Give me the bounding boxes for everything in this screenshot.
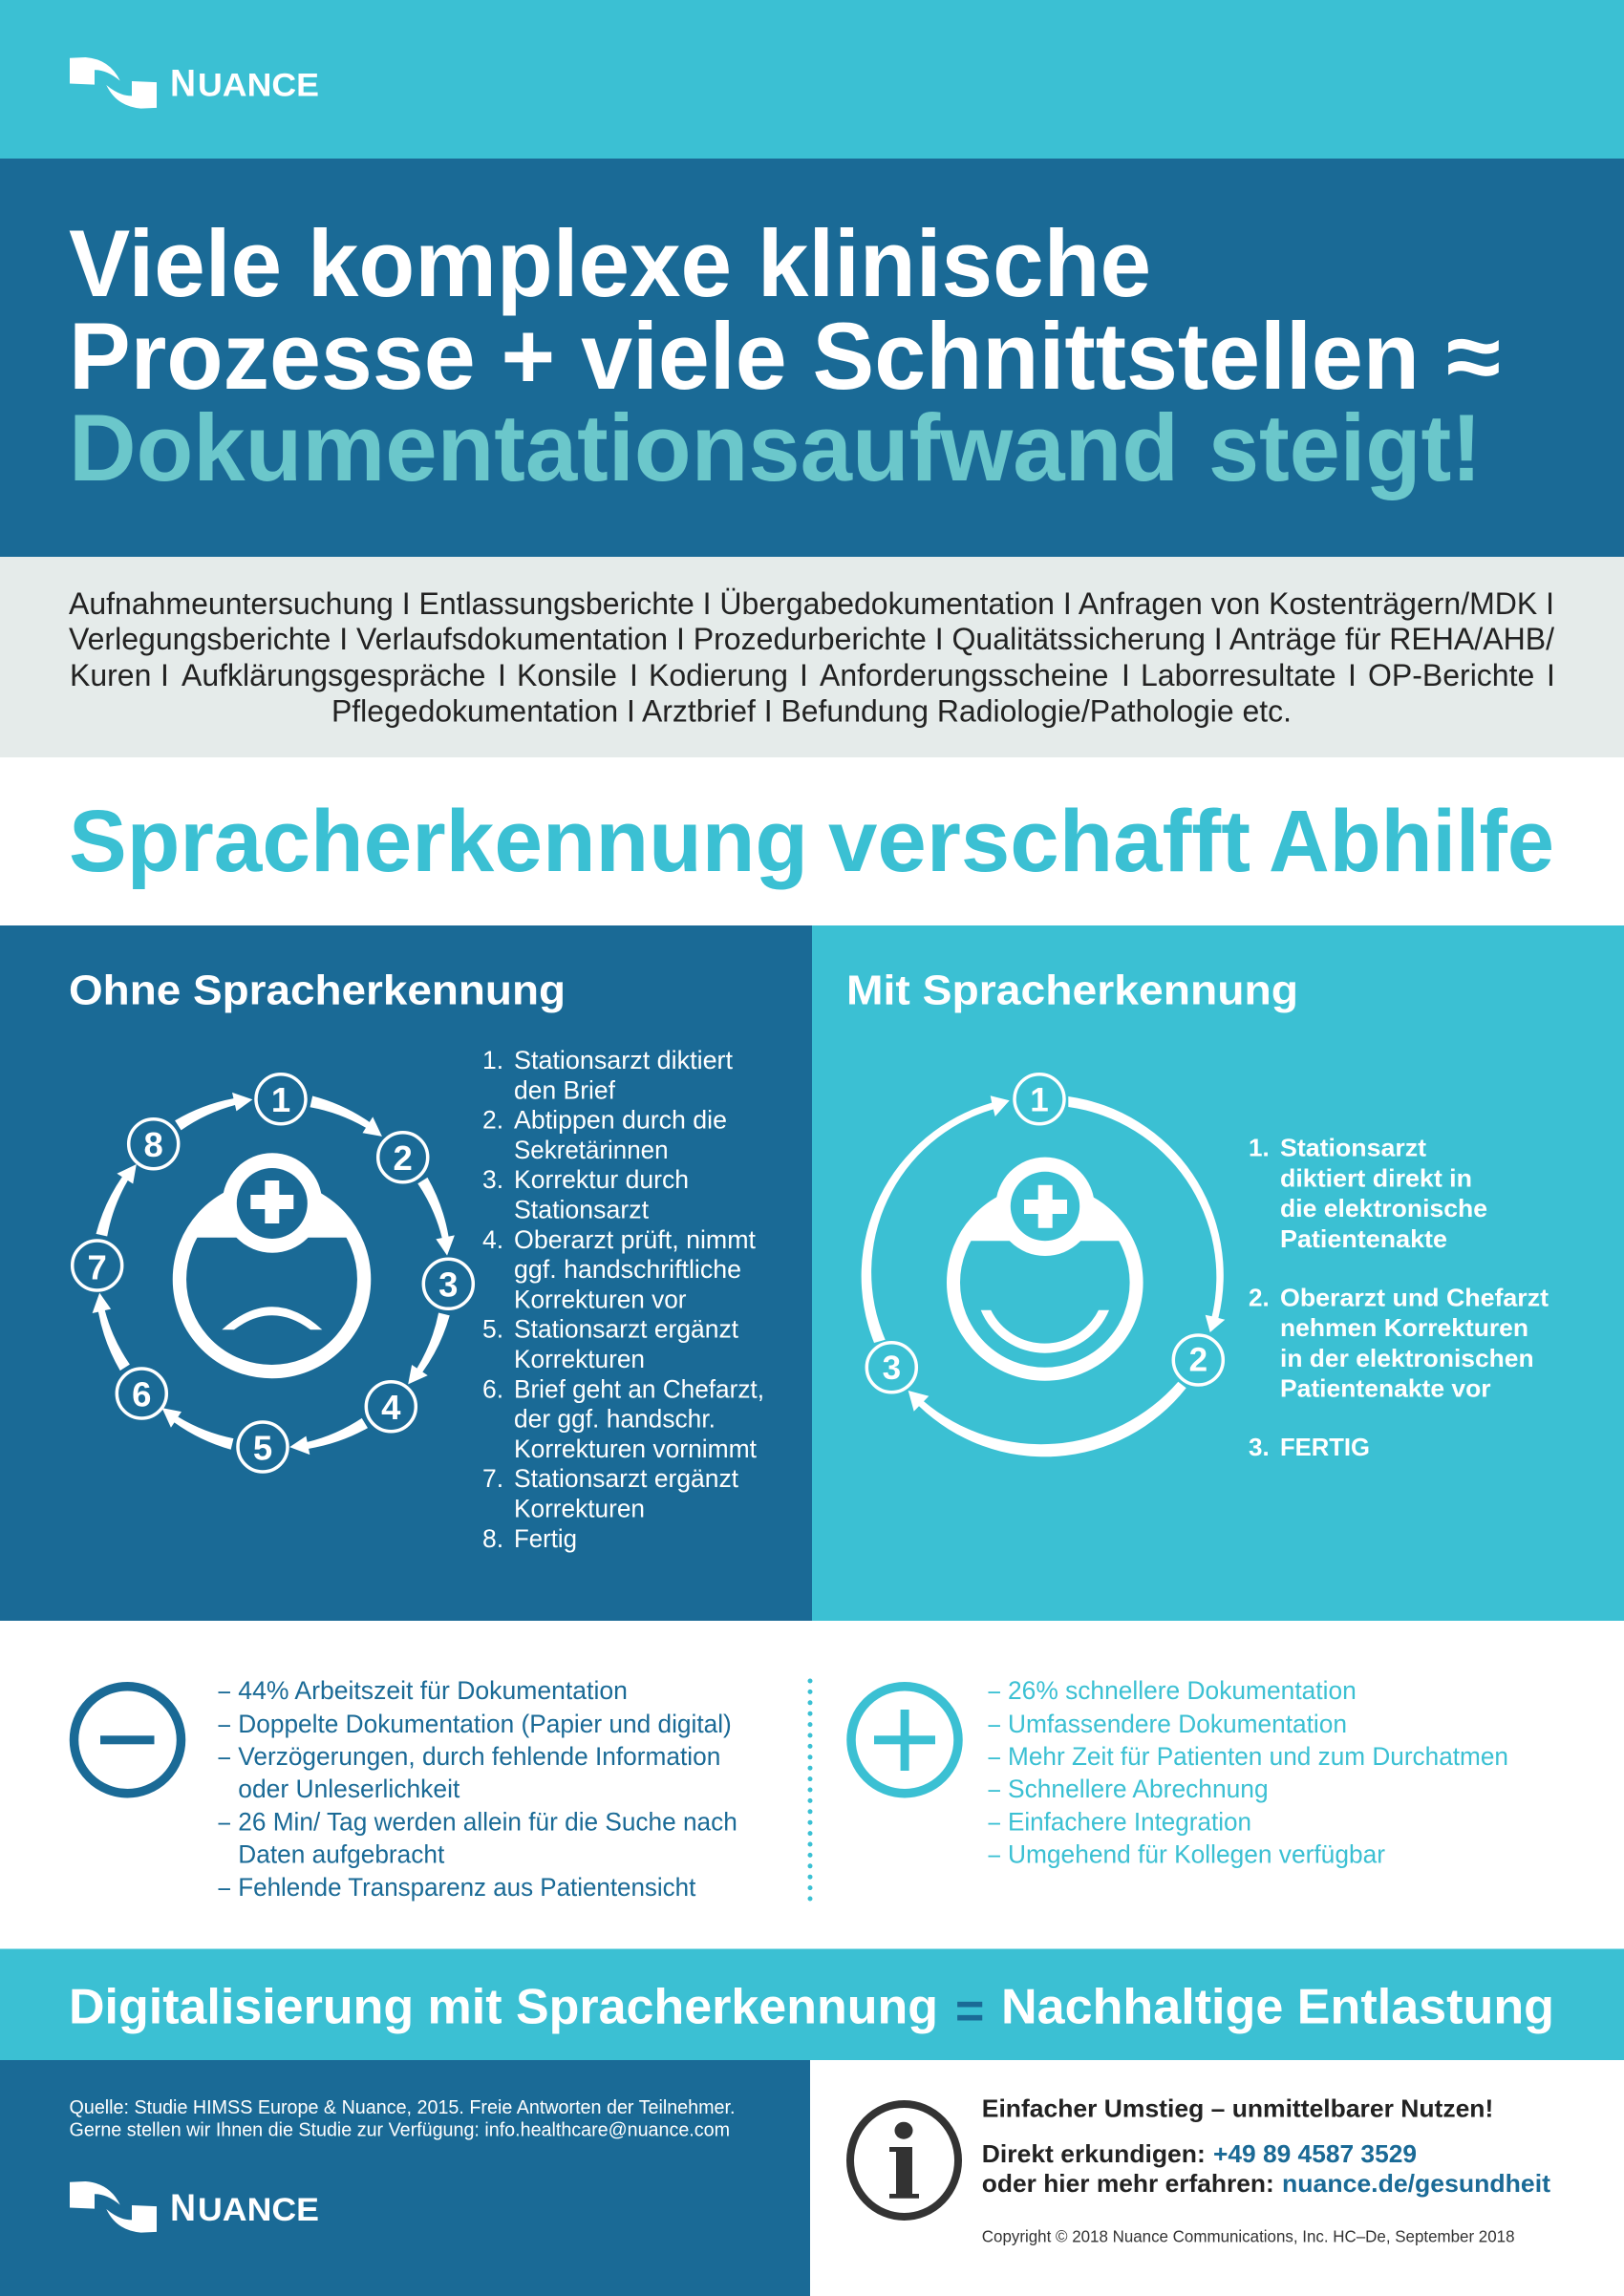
numbered list: steps without speech recognition: der ggf. handschr. [514,1405,716,1434]
contact text [982,2094,1550,2198]
panel heading: Ohne Spracherkennung [69,968,566,1014]
numbered list: steps with speech recognition: die elektronische [1280,1194,1487,1222]
text block: documentation list: OP-Berichte [1368,658,1543,692]
numbered list: steps without speech recognition: Stationsarzt ergänzt [514,1315,739,1344]
numbered list: steps without speech recognition: Stationsarzt ergänzt [514,1464,739,1493]
panel: Mit Spracherkennung [812,925,1624,1621]
text block: documentation list: I [498,658,515,692]
contact text: oder hier mehr erfahren: [982,2169,1274,2198]
numbered list: steps without speech recognition: 6. [482,1374,503,1403]
numbered list: steps without speech recognition: Korrekturen vornimmt [514,1435,758,1463]
numbered list: steps with speech recognition: nehmen Korrekturen [1280,1313,1528,1342]
list: advantages: Schnellere Abrechnung [1008,1775,1269,1803]
list: disadvantages: – [218,1808,230,1837]
list: advantages: Umfassendere Dokumentation [1008,1710,1347,1738]
title: Viele komplexe klinische [69,210,1151,316]
text block: documentation list: I [1348,658,1365,692]
step numbers 1 to 8: 8 [144,1125,163,1164]
numbered list: steps with speech recognition: 1. [1249,1134,1270,1162]
text block: documentation list: Anforderungsscheine [820,658,1117,692]
step circles 1 to 3 [866,1074,1223,1392]
numbered list: steps with speech recognition: Patientenakte vor [1280,1374,1491,1403]
numbered list: steps without speech recognition: ggf. handschriftliche [514,1255,741,1284]
cycle arrows: eight steps [72,1073,475,1476]
text block: documentation list: Kodierung [649,658,797,692]
numbered list: steps without speech recognition [482,1046,764,1553]
icon: information [850,2104,958,2217]
step numbers 1 to 8: 1 [271,1080,290,1119]
logo: Nuance footer: UANCE [198,2192,319,2228]
step numbers 1 to 8: 4 [381,1388,401,1427]
list: advantages: – [988,1840,1000,1869]
numbered list: steps without speech recognition: Sekretärinnen [514,1136,669,1164]
list: disadvantages: Verzögerungen, durch fehlende Information [238,1742,720,1771]
logo: Nuance: UANCE [198,68,319,104]
text block: documentation list: Laborresultate [1141,658,1344,692]
cycle arrows: three steps [862,1095,1225,1456]
panel: documentation types [0,557,1624,757]
text block: documentation list: Kuren [70,658,160,692]
title: steigt! [1208,394,1482,500]
numbered list: steps without speech recognition: Brief geht an Chefarzt, [514,1374,764,1403]
list: advantages: – [988,1775,1000,1803]
source text: Quelle: Studie HIMSS Europe & Nuance, 2015. Freie Antworten der Teilnehmer. [69,2097,736,2118]
list: disadvantages: Doppelte Dokumentation (Papier und digital) [238,1710,732,1738]
icon: minus [75,1687,182,1794]
contact text: nuance.de/gesundheit [1282,2169,1550,2198]
numbered list: steps with speech recognition: in der elektronischen [1280,1344,1534,1372]
text block: documentation list: I [160,658,178,692]
list: disadvantages: 44% Arbeitszeit für Dokumentation [238,1676,628,1705]
numbered list: steps without speech recognition: Stationsarzt [514,1196,650,1224]
list: disadvantages: Fehlende Transparenz aus Patientensicht [238,1873,696,1902]
icon: happy doctor [953,1158,1137,1374]
step numbers 1 to 8: 7 [88,1247,107,1286]
text block: documentation list: I [630,658,647,692]
logo: Nuance footer: N [170,2187,196,2229]
icon: plus [851,1687,958,1794]
banner: conclusion: = [955,1984,984,2039]
text block: documentation list: Verlegungsberichte I Verlaufsdokumentation I Prozedurberichte I Qualitätssicherung I Anträge für REHA/AHB/ [69,622,1554,656]
list: advantages [988,1676,1508,1869]
source text [69,2097,736,2141]
panel heading: Mit Spracherkennung [846,968,1298,1014]
source text: Gerne stellen wir Ihnen die Studie zur Verfügung: info.healthcare@nuance.com [69,2120,730,2141]
numbered list: steps without speech recognition: 4. [482,1225,503,1254]
text block: documentation list: Aufnahmeuntersuchung I Entlassungsberichte I Übergabedokumentation I Anfragen von Kostenträgern/MDK I [69,586,1554,621]
step numbers 1 to 3: 3 [883,1350,901,1387]
step numbers 1 to 8: 5 [253,1428,272,1467]
step numbers 1 to 8: 3 [438,1265,458,1304]
list: advantages: Einfachere Integration [1008,1808,1251,1837]
text block: documentation list: I [800,658,817,692]
numbered list: steps with speech recognition [1249,1134,1549,1461]
step numbers 1 to 3 [883,1081,1207,1387]
text block: documentation list: I [1122,658,1139,692]
text block: documentation list [69,586,1555,728]
numbered list: steps without speech recognition: Korrekturen [514,1494,645,1522]
panel: footer source [0,2060,810,2296]
copyright: Copyright © 2018 Nuance Communications, Inc. HC–De, September 2018 [982,2226,1515,2245]
list: disadvantages: – [218,1710,230,1738]
list: disadvantages [218,1676,737,1902]
numbered list: steps without speech recognition: Korrekturen [514,1345,645,1373]
title: Dokumentationsaufwand [69,394,1179,500]
text block: documentation list: Konsile [517,658,626,692]
numbered list: steps with speech recognition: 2. [1249,1284,1270,1312]
list: advantages: – [988,1742,1000,1771]
text block: documentation list: Aufklärungsgespräche [182,658,494,692]
logo: Nuance [70,57,319,109]
numbered list: steps without speech recognition: Stationsarzt diktiert [514,1046,734,1074]
step numbers 1 to 3: 2 [1189,1341,1207,1379]
numbered list: steps without speech recognition: Korrekturen vor [514,1285,687,1313]
title [69,210,1501,500]
numbered list: steps without speech recognition: 7. [482,1464,503,1493]
step numbers 1 to 8: 6 [132,1374,151,1414]
heading: Spracherkennung verschafft Abhilfe: Spracherkennung [69,793,808,890]
numbered list: steps without speech recognition: Oberarzt prüft, nimmt [514,1225,757,1254]
step numbers 1 to 3: 1 [1030,1081,1049,1118]
numbered list: steps with speech recognition: Stationsarzt [1280,1134,1426,1162]
list: disadvantages: oder Unleserlichkeit [238,1775,460,1803]
hero panel [0,159,1624,557]
numbered list: steps without speech recognition: 3. [482,1165,503,1194]
banner: conclusion [0,1948,1624,2060]
contact text: +49 89 4587 3529 [1213,2139,1417,2168]
list: disadvantages: – [218,1742,230,1771]
panel: Ohne Spracherkennung [0,925,812,1621]
list: advantages: – [988,1808,1000,1837]
numbered list: steps without speech recognition: Fertig [514,1524,577,1553]
numbered list: steps without speech recognition: 8. [482,1524,503,1553]
contact text: Direkt erkundigen: [982,2139,1206,2168]
numbered list: steps without speech recognition: Korrektur durch [514,1165,689,1194]
list: advantages: 26% schnellere Dokumentation [1008,1676,1357,1705]
numbered list: steps with speech recognition: diktiert direkt in [1280,1164,1472,1193]
numbered list: steps with speech recognition: Patientenakte [1280,1224,1447,1253]
list: advantages: Umgehend für Kollegen verfügbar [1008,1840,1385,1869]
numbered list: steps with speech recognition: FERTIG [1280,1433,1370,1461]
logo: Nuance footer [70,2181,319,2233]
numbered list: steps without speech recognition: Abtippen durch die [514,1106,727,1135]
list: advantages: – [988,1710,1000,1738]
numbered list: steps without speech recognition: 5. [482,1315,503,1344]
step circles 1 to 8 [73,1074,473,1472]
step numbers 1 to 8 [88,1080,458,1467]
list: disadvantages: Daten aufgebracht [238,1840,445,1869]
banner: conclusion: Digitalisierung mit Spracherkennung [69,1980,938,2035]
text block: documentation list: I [1547,658,1555,692]
logo: Nuance: N [170,63,196,105]
contact text: Einfacher Umstieg – unmittelbarer Nutzen! [982,2094,1493,2123]
heading: Spracherkennung verschafft Abhilfe: Abhilfe [1269,793,1554,890]
numbered list: steps without speech recognition: den Brief [514,1075,616,1104]
step numbers 1 to 8: 2 [394,1138,413,1178]
title: Prozesse + viele Schnittstellen [69,303,1420,409]
numbered list: steps without speech recognition: 2. [482,1106,503,1135]
numbered list: steps without speech recognition: 1. [482,1046,503,1074]
list: disadvantages: – [218,1676,230,1705]
list: disadvantages: – [218,1873,230,1902]
list: disadvantages: 26 Min/ Tag werden allein für die Suche nach [238,1808,737,1837]
text block: documentation list: Pflegedokumentation I Arztbrief I Befundung Radiologie/Pathologie etc. [331,693,1292,728]
header band [0,0,1624,159]
list: advantages: – [988,1676,1000,1705]
list: advantages: Mehr Zeit für Patienten und zum Durchatmen [1008,1742,1508,1771]
banner: conclusion: Nachhaltige Entlastung [1001,1980,1554,2035]
numbered list: steps with speech recognition: Oberarzt und Chefarzt [1280,1284,1549,1312]
heading: Spracherkennung verschafft Abhilfe: verschafft [828,793,1250,890]
numbered list: steps with speech recognition: 3. [1249,1433,1270,1461]
title: ≈ [1446,303,1501,409]
icon: unhappy doctor [180,1153,364,1371]
heading: Spracherkennung verschafft Abhilfe [69,793,1554,890]
